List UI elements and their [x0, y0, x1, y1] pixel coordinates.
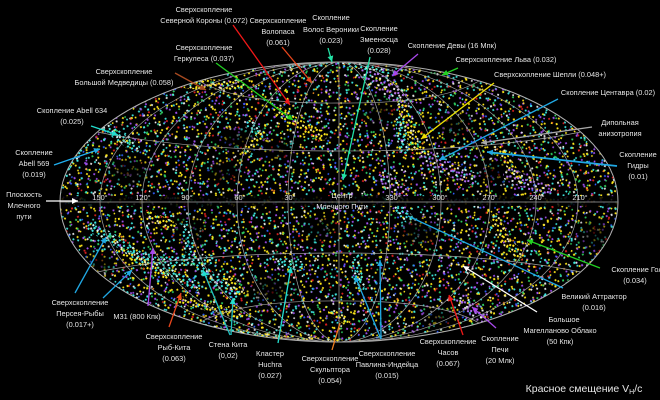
- label: Hercules supercluster: Сверхскопление: [176, 43, 232, 52]
- galactic plane gap: [60, 196, 618, 206]
- longitude labels: 330°: [385, 193, 401, 202]
- label: Abell 569: Скопление: [15, 148, 53, 157]
- label: Columba cluster: (0.034): [623, 276, 647, 285]
- label: Hercules supercluster: Геркулеса (0.037): [174, 54, 234, 63]
- label: Centaurus cluster: Скопление Центавра (0.02): [561, 88, 655, 97]
- label: Fornax cluster: [472, 307, 519, 365]
- label: Pisces-Cetus supercluster: Рыб-Кита: [158, 343, 191, 352]
- label: Sculptor supercluster: Сверхскопление: [302, 354, 358, 363]
- label: Milky Way plane with arrow: пути: [16, 212, 32, 221]
- sky map: galaxy dots: [60, 62, 618, 342]
- label: Ursa Major supercluster: [75, 67, 206, 90]
- label: Coma cluster: Скопление: [312, 13, 350, 22]
- label: Bootes supercluster: Сверхскопление: [250, 16, 306, 25]
- label: M31: M31 (800 Кпк): [113, 312, 161, 321]
- label: Fornax cluster: Скопление: [481, 334, 519, 343]
- label: Coma cluster: (0.023): [319, 36, 343, 45]
- label: Horologium supercluster: (0.067): [436, 359, 460, 368]
- label: Cetus wall: Стена Кита: [209, 340, 248, 349]
- label: Coma cluster: Волос Вероники: [303, 25, 359, 34]
- label: dipole anisotropy: [481, 118, 642, 143]
- label: Coma cluster: [303, 13, 359, 62]
- label: Hydra cluster: [487, 150, 657, 181]
- longitude labels: 240°: [529, 193, 545, 202]
- longitude labels: 30°: [284, 193, 296, 202]
- label: Sculptor supercluster: [302, 323, 358, 385]
- longitude labels: [92, 193, 588, 202]
- label: Pisces-Cetus supercluster: [146, 293, 202, 363]
- label: Abell 634: Скопление Abell 634: [37, 106, 107, 115]
- label: Abell 569: Abell 569: [19, 159, 49, 168]
- label: Pavo-Indus supercluster: [355, 260, 419, 380]
- label: Abell 569: [15, 148, 100, 179]
- label: Bootes supercluster: (0.061): [266, 38, 290, 47]
- label: Sculptor supercluster: (0.054): [318, 376, 342, 385]
- label: Northern Crown supercluster: Северной Короны (0.072): [160, 16, 248, 25]
- label: Huchra cluster: Huchra: [258, 360, 283, 369]
- label: Northern Crown supercluster: Сверхскопление: [176, 5, 232, 14]
- label: Ophiuchus cluster: (0.028): [367, 46, 391, 55]
- label: Abell 634: (0.025): [60, 117, 84, 126]
- label: centre of the Milky Way: Центр: [331, 191, 353, 200]
- longitude labels: 90°: [181, 193, 193, 202]
- label: centre of the Milky Way: [316, 191, 368, 211]
- label: Fornax cluster: Печи: [491, 345, 509, 354]
- label: Large Magellanic Cloud: Большое: [548, 315, 580, 324]
- label: Great Attractor: Великий Аттрактор: [561, 292, 627, 301]
- label: Sculptor supercluster: Скульптора: [310, 365, 351, 374]
- label: Shapley supercluster: Сверхскопление Шепли (0.048+): [494, 70, 606, 79]
- coordinate grid: [60, 62, 618, 342]
- label: Pisces-Cetus supercluster: (0.063): [162, 354, 186, 363]
- label: Milky Way plane with arrow: [6, 190, 78, 221]
- label: Pavo-Indus supercluster: Павлина-Индейца: [356, 360, 419, 369]
- label: Ursa Major supercluster: Большой Медведицы (0.058): [75, 78, 173, 87]
- label: Northern Crown supercluster: [160, 5, 290, 105]
- label: Perseus-Pisces supercluster: [52, 237, 132, 329]
- label: Centaurus cluster: [439, 88, 655, 160]
- label: Pavo-Indus supercluster: (0.015): [375, 371, 399, 380]
- label: Huchra cluster: [256, 267, 291, 380]
- label: Shapley supercluster: [421, 70, 606, 139]
- label: Large Magellanic Cloud: Магелланово Облако: [523, 326, 597, 335]
- label: Abell 634: [37, 106, 118, 135]
- label: Horologium supercluster: Сверхскопление: [420, 337, 476, 346]
- label: Cetus wall: (0,02): [218, 351, 238, 360]
- label: centre of the Milky Way: Млечного Пути: [316, 202, 368, 211]
- title: redshift legend: Красное смещение V: [526, 383, 629, 395]
- longitude labels: 120°: [135, 193, 151, 202]
- title: redshift legend: H: [629, 389, 634, 396]
- label: Virgo cluster: [392, 41, 496, 76]
- label: Hydra cluster: Скопление: [619, 150, 657, 159]
- label: Cetus wall: [203, 270, 248, 360]
- label: Pavo-Indus supercluster: Сверхскопление: [359, 349, 415, 358]
- label: Huchra cluster: (0.027): [258, 371, 282, 380]
- label: Perseus-Pisces supercluster: (0.017+): [66, 320, 94, 329]
- label: Hydra cluster: (0.01): [628, 172, 648, 181]
- label: Hercules supercluster: [174, 43, 293, 120]
- longitude labels: 210°: [572, 193, 588, 202]
- label: M31: [113, 248, 161, 321]
- label: Huchra cluster: Кластер: [256, 349, 284, 358]
- label: Large Magellanic Cloud: [463, 266, 597, 346]
- label: Bootes supercluster: [250, 16, 312, 83]
- label: Great Attractor: [408, 216, 627, 312]
- label: dipole anisotropy: Дипольная: [601, 118, 639, 127]
- label: Milky Way plane with arrow: Млечного: [7, 201, 41, 210]
- label: dipole anisotropy: анизотропия: [598, 129, 642, 138]
- label: Leo supercluster: [442, 55, 556, 75]
- label: Large Magellanic Cloud: (50 Кпк): [547, 337, 573, 346]
- longitude labels: 150°: [92, 193, 108, 202]
- label: Horologium supercluster: Часов: [438, 348, 458, 357]
- label: Perseus-Pisces supercluster: Сверхскопление: [52, 298, 108, 307]
- label: Horologium supercluster: [420, 295, 476, 368]
- label: Perseus-Pisces supercluster: Персея-Рыбы: [56, 309, 104, 318]
- label: Fornax cluster: (20 Млк): [486, 356, 514, 365]
- label: Ophiuchus cluster: Скопление: [360, 24, 398, 33]
- label: Ophiuchus cluster: Змееносца: [360, 35, 399, 44]
- longitude labels: 60°: [234, 193, 246, 202]
- longitude labels: 270°: [482, 193, 498, 202]
- label: Milky Way plane with arrow: Плоскость: [6, 190, 42, 199]
- label: Hydra cluster: Гидры: [627, 161, 649, 170]
- label: Leo supercluster: Сверхскопление Льва (0.032): [456, 55, 556, 64]
- label: Virgo cluster: Скопление Девы (16 Мпк): [408, 41, 496, 50]
- longitude labels: 300°: [432, 193, 448, 202]
- label: Ursa Major supercluster: Сверхскопление: [96, 67, 152, 76]
- label: Bootes supercluster: Волопаса: [261, 27, 296, 36]
- title: redshift legend: /c: [634, 383, 642, 395]
- label: Abell 569: (0.019): [22, 170, 46, 179]
- label: Great Attractor: (0.016): [582, 303, 606, 312]
- label: Pisces-Cetus supercluster: Сверхскопление: [146, 332, 202, 341]
- label: Ophiuchus cluster: [343, 24, 399, 180]
- label: Columba cluster: [527, 240, 660, 285]
